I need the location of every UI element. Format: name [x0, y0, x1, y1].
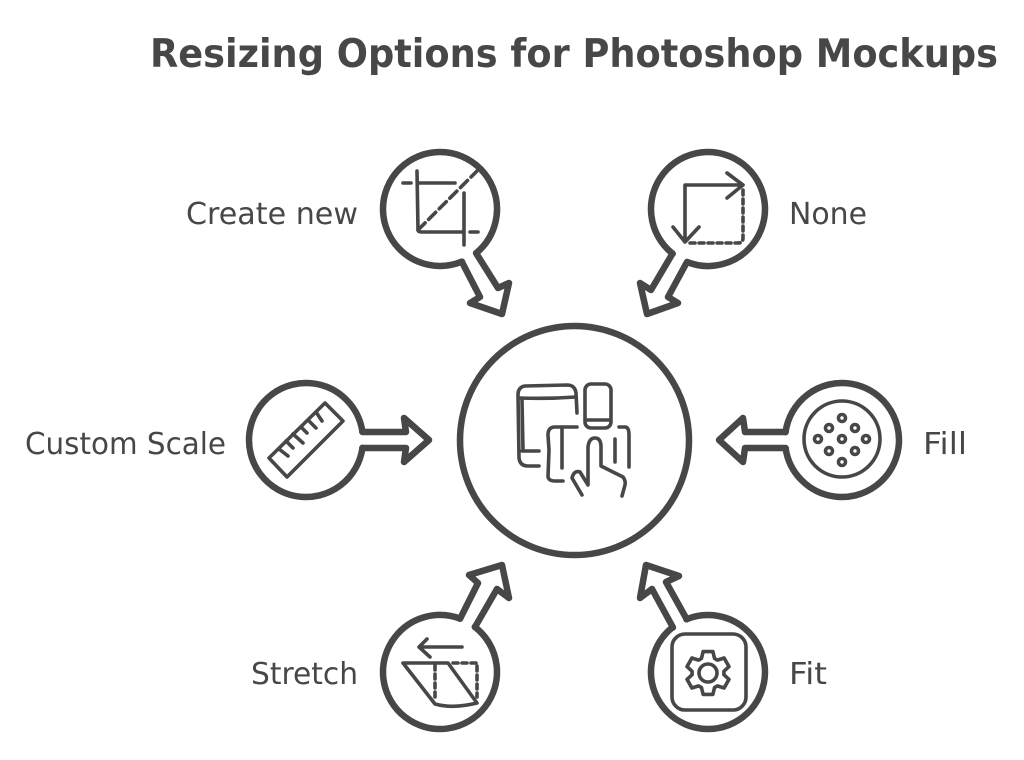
arrow circle: Stretch — [360, 565, 520, 752]
node: Custom Scale — [25, 376, 429, 504]
arrow circle: Fit — [634, 565, 782, 746]
arrow circle: None — [628, 129, 788, 314]
label: Create new: Create new — [186, 197, 358, 232]
arrow circle: Custom Scale — [242, 376, 429, 504]
label: Custom Scale: Custom Scale — [25, 427, 226, 462]
node: Stretch — [251, 565, 520, 752]
icon: original size arrows — [673, 173, 743, 243]
icon: crop — [403, 171, 478, 245]
label: None: None — [789, 197, 867, 232]
label: Fill: Fill — [923, 427, 967, 462]
label: Stretch: Stretch — [251, 657, 358, 692]
title: Resizing Options for Photoshop Mockups — [150, 32, 998, 77]
node: None — [628, 129, 867, 314]
arrow circle: Fill — [719, 376, 906, 504]
label: Fit: Fit — [789, 657, 827, 692]
central hub: devices and hand — [460, 326, 689, 555]
icon: gear in rounded square — [672, 634, 746, 710]
node: Fit — [634, 565, 827, 746]
node: Create new — [186, 135, 514, 314]
arrow circle: Create new — [366, 135, 514, 314]
node: Fill — [719, 376, 967, 504]
icon: responsive devices and hand — [518, 384, 629, 496]
icon: dots in a circle — [804, 401, 880, 477]
icon: ruler — [269, 403, 343, 477]
icon: stretched parallelogram — [403, 639, 477, 706]
